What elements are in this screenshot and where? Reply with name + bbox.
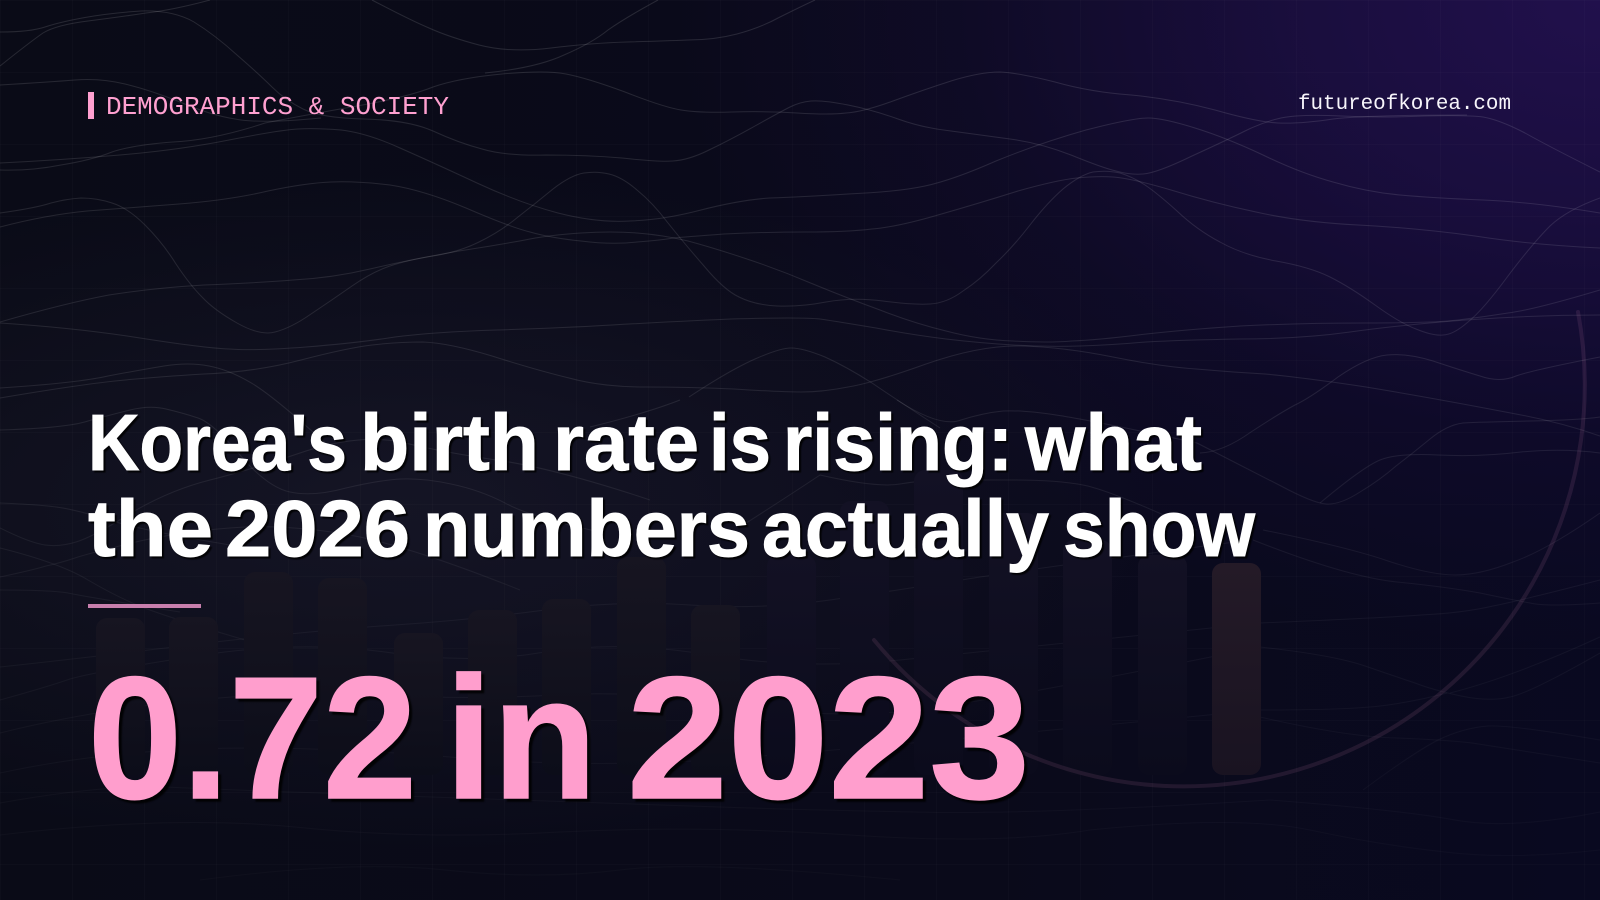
title: the (88, 484, 213, 573)
faint background bar chart (96, 470, 1261, 775)
decorative ring arc (874, 312, 1585, 786)
divider (88, 604, 201, 608)
big statistic: 2023 (627, 640, 1030, 835)
title: is (709, 398, 771, 487)
accent bar (88, 92, 94, 119)
big statistic: in (445, 640, 597, 835)
title: actually (762, 484, 1049, 573)
category text: DEMOGRAPHICS & SOCIETY (106, 92, 449, 122)
title: birth (360, 398, 539, 487)
big statistic: 0.72 (88, 640, 417, 835)
title: what (1024, 398, 1202, 487)
title: show (1063, 484, 1256, 573)
title: Korea's (88, 398, 347, 487)
title: rate (553, 398, 699, 487)
site url: futureofkorea.com (1298, 93, 1511, 116)
big statistic (88, 640, 1030, 835)
title (88, 398, 1256, 573)
highlighted pink bar (1212, 563, 1261, 775)
category label (88, 92, 449, 122)
title: numbers (423, 484, 750, 573)
title: 2026 (225, 484, 410, 573)
title: rising: (783, 398, 1013, 487)
